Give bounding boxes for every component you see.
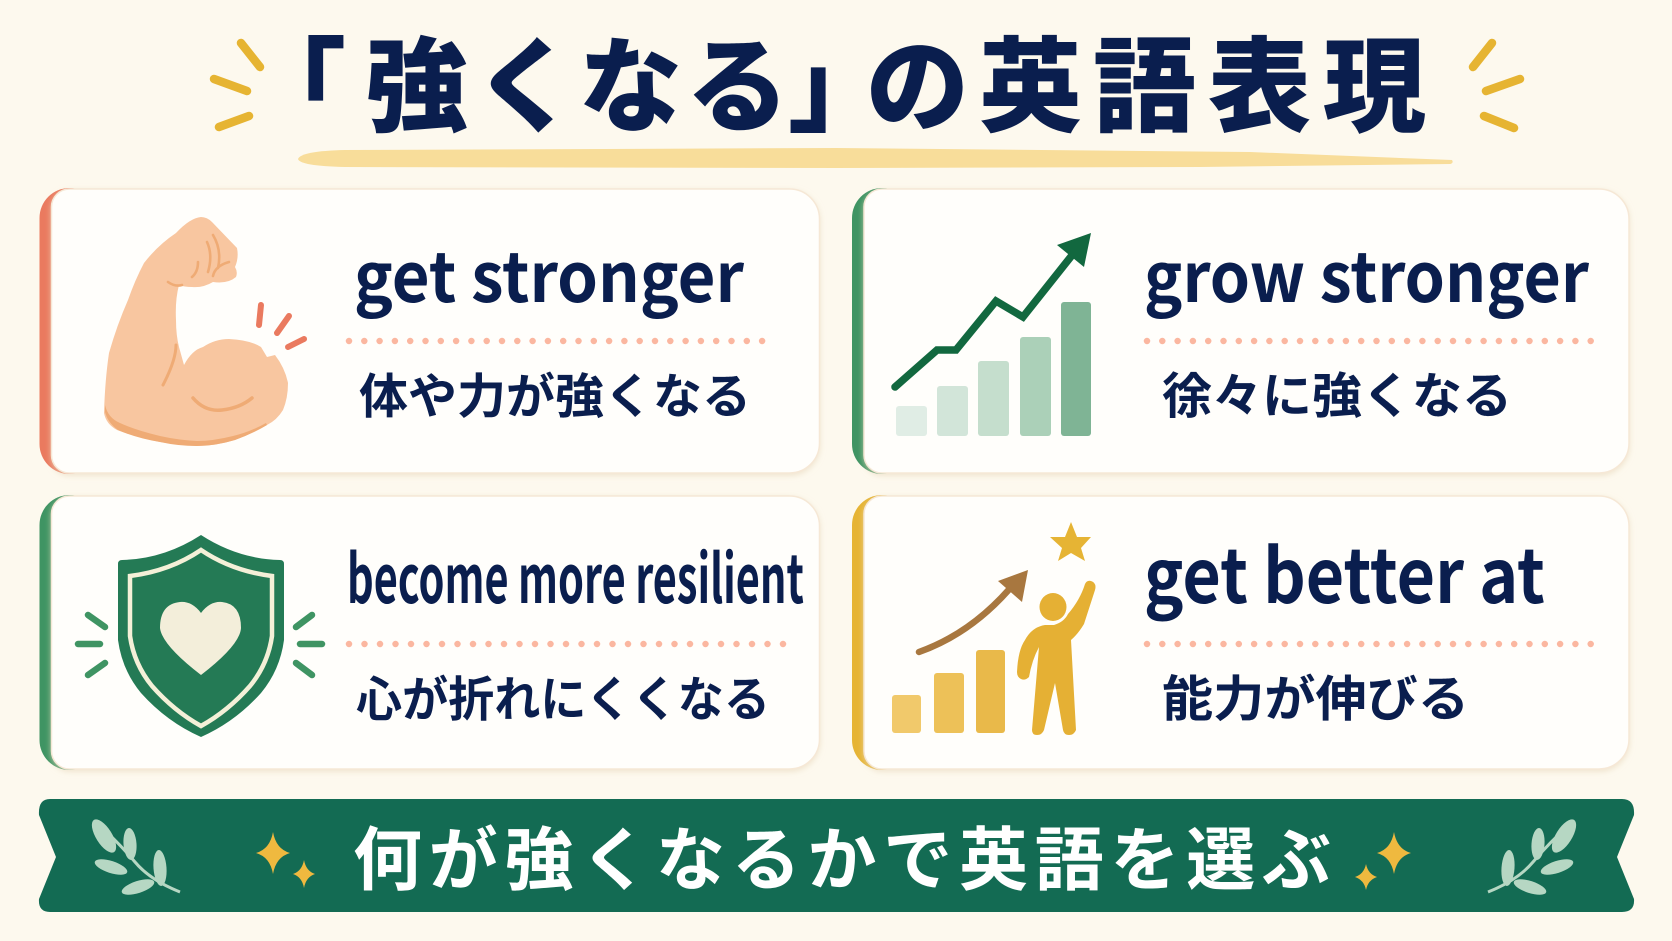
english phrase: grow stronger: [1144, 222, 1590, 322]
dotted divider: [349, 338, 765, 344]
icon: star: [1050, 522, 1091, 561]
banner text: 何が強くなるかで英語を選ぶ: [353, 804, 1331, 904]
japanese meaning: 徐々に強くなる: [1162, 357, 1512, 428]
icon: left title sparks: [214, 43, 260, 127]
panel: get better at: [852, 495, 1629, 770]
icon: right title sparks: [1473, 43, 1520, 128]
bar chart: [896, 302, 1091, 436]
panel: grow stronger: [852, 188, 1629, 474]
arrow: curved growth: [919, 570, 1028, 652]
title: 「強くなる」の英語表現: [243, 4, 1426, 153]
icon: right branch: [1488, 816, 1581, 898]
banner: [39, 799, 1634, 912]
japanese meaning: 心が折れにくくなる: [356, 660, 770, 730]
dotted divider: [349, 641, 785, 647]
icon: shield with heart: [118, 535, 284, 737]
icon: left sparkles: [256, 832, 315, 888]
title underline: [298, 148, 1453, 168]
panel: get stronger: [40, 188, 820, 474]
arrow: rising line: [895, 233, 1091, 387]
english phrase: become more resilient: [347, 526, 804, 623]
japanese meaning: 能力が伸びる: [1162, 660, 1469, 731]
banner ribbon: [39, 799, 1634, 912]
icon: shield rays: [78, 615, 322, 675]
japanese meaning: 体や力が強くなる: [359, 357, 751, 427]
icon: right sparkles: [1355, 832, 1411, 890]
icon: left branch: [87, 816, 180, 898]
icon: flexed arm: [104, 217, 288, 446]
dotted divider: [1147, 641, 1594, 647]
english phrase: get better at: [1144, 516, 1545, 625]
english phrase: get stronger: [354, 222, 745, 322]
panel: become more resilient: [40, 495, 820, 770]
dotted divider: [1147, 338, 1594, 344]
icon: person reaching: [1017, 581, 1096, 735]
bar chart: [892, 650, 1005, 733]
icon: arm sparks: [259, 305, 304, 347]
